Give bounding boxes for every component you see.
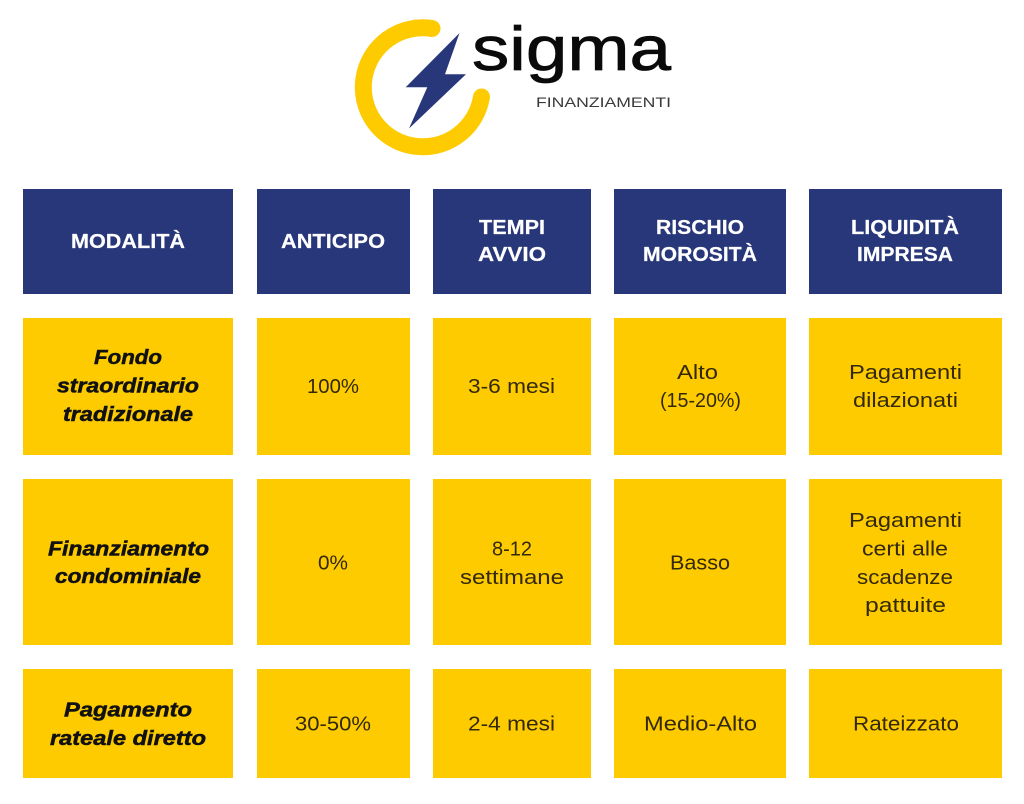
cell: liquidita: certi alle bbox=[862, 538, 948, 560]
cell: modalita: Fondo bbox=[94, 347, 162, 369]
header: rischio morosita: MOROSITÀ bbox=[643, 243, 757, 266]
cell: anticipo bbox=[257, 318, 410, 455]
header: tempi avvio: AVVIO bbox=[478, 244, 546, 266]
cell: liquidita: Rateizzato bbox=[853, 714, 959, 736]
cell: anticipo: 100% bbox=[307, 376, 359, 398]
header: modalita: MODALITÀ bbox=[71, 230, 185, 253]
cell: liquidita bbox=[809, 669, 1002, 778]
icon: lightning bolt bbox=[406, 33, 466, 128]
cell: rischio: Basso bbox=[670, 552, 730, 574]
header: anticipo: ANTICIPO bbox=[281, 231, 385, 253]
cell: anticipo bbox=[257, 479, 410, 645]
logo wordmark: sigma bbox=[472, 15, 672, 84]
cell: anticipo bbox=[257, 669, 410, 778]
header: tempi avvio bbox=[433, 189, 591, 294]
row: finanziamento condominiale bbox=[23, 479, 1002, 645]
cell: tempi bbox=[433, 318, 591, 455]
cell: modalita bbox=[23, 479, 233, 645]
cell: modalita bbox=[23, 318, 233, 455]
row: fondo straordinario bbox=[23, 318, 1002, 455]
cell: modalita: tradizionale bbox=[63, 404, 193, 426]
cell: liquidita: Pagamenti bbox=[849, 362, 962, 384]
cell: modalita: condominiale bbox=[55, 566, 201, 588]
cell: modalita: Finanziamento bbox=[48, 538, 209, 560]
cell: rischio: Medio-Alto bbox=[644, 714, 757, 736]
header: liquidita impresa bbox=[809, 189, 1002, 294]
header: rischio morosita bbox=[614, 189, 786, 294]
cell: modalita: straordinario bbox=[57, 376, 199, 398]
cell: rischio bbox=[614, 318, 786, 455]
cell: anticipo: 0% bbox=[318, 552, 348, 574]
header: liquidita impresa: LIQUIDITÀ bbox=[851, 216, 959, 239]
cell: tempi: 8-12 bbox=[492, 538, 532, 560]
logo subtitle: FINANZIAMENTI bbox=[536, 94, 671, 110]
cell: rischio: (15-20%) bbox=[660, 390, 741, 412]
cell: liquidita: dilazionati bbox=[853, 390, 958, 412]
cell: modalita: Pagamento bbox=[64, 700, 192, 722]
logo bbox=[363, 15, 672, 147]
cell: liquidita: scadenze bbox=[857, 567, 953, 589]
cell: tempi: 3-6 mesi bbox=[468, 376, 555, 398]
logo ring bbox=[363, 28, 482, 147]
header: liquidita impresa: IMPRESA bbox=[857, 244, 953, 266]
cell: modalita: rateale diretto bbox=[50, 728, 206, 750]
cell: tempi: settimane bbox=[460, 567, 564, 589]
header: tempi avvio: TEMPI bbox=[479, 217, 545, 239]
header: modalita bbox=[23, 189, 233, 294]
header: rischio morosita: RISCHIO bbox=[656, 217, 744, 239]
cell: tempi bbox=[433, 669, 591, 778]
cell: rischio: Alto bbox=[677, 362, 718, 384]
cell: liquidita: Pagamenti bbox=[849, 510, 962, 532]
cell: modalita bbox=[23, 669, 233, 778]
cell: liquidita: pattuite bbox=[865, 595, 946, 617]
cell: liquidita bbox=[809, 318, 1002, 455]
cell: rischio bbox=[614, 479, 786, 645]
cell: anticipo: 30-50% bbox=[295, 714, 371, 736]
header row bbox=[23, 189, 1002, 294]
cell: tempi bbox=[433, 479, 591, 645]
cell: rischio bbox=[614, 669, 786, 778]
row: pagamento rateale bbox=[23, 669, 1002, 778]
cell: tempi: 2-4 mesi bbox=[468, 714, 555, 736]
header: anticipo bbox=[257, 189, 410, 294]
cell: liquidita bbox=[809, 479, 1002, 645]
